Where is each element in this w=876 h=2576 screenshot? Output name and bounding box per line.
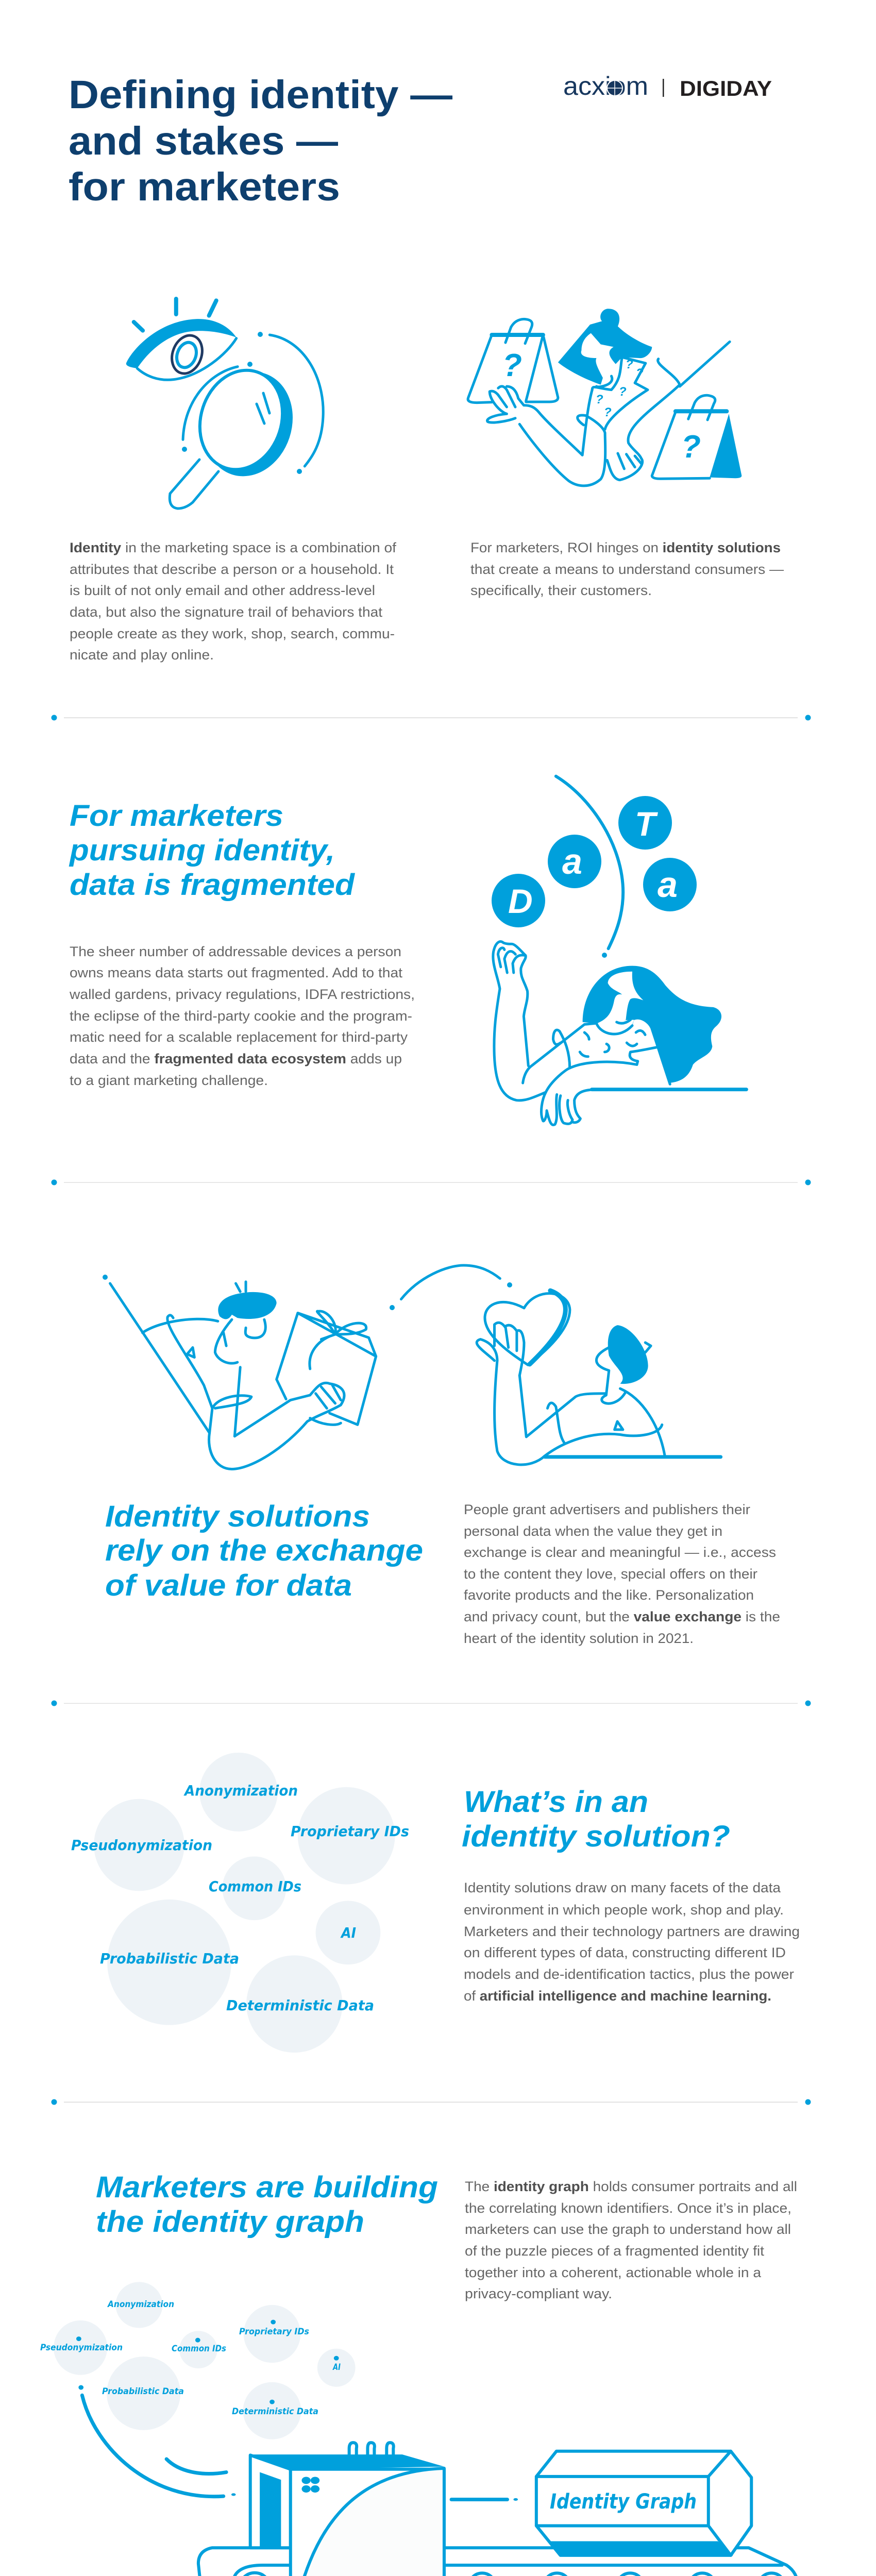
text block: value exchange: exchange is clear and meaningful — i.e., access (464, 1545, 776, 1560)
bubble cluster: identity solution facets (71, 1753, 409, 2053)
text block: fragmented data: matic need for a scalable replacement for third-party (70, 1029, 408, 1045)
logos: acxiom and Digiday: DIGIDAY (680, 76, 772, 100)
title: and stakes — (69, 119, 338, 163)
icon: woman holding shopping bags with question marks: ? (626, 358, 633, 371)
text block: identity definition (70, 540, 397, 663)
small bubble cluster feeding the machine: Common IDs (172, 2344, 226, 2354)
bubble cluster: identity solution facets: Probabilistic Data (100, 1950, 239, 1967)
icon: person juggling DATA letters: D (508, 882, 533, 920)
heading: exchange of value (105, 1500, 423, 1602)
icon: person juggling DATA letters: T (635, 805, 658, 843)
text block: identity graph: together into a coherent, actionable whole in a (465, 2265, 762, 2280)
heading: data is fragmented: data is fragmented (70, 868, 356, 902)
icon: woman holding shopping bags with question marks: ? (502, 348, 522, 383)
small bubble cluster feeding the machine: Probabilistic Data (102, 2386, 184, 2397)
text block: value exchange (464, 1502, 780, 1646)
heading: building the identity graph: Marketers are building (96, 2171, 438, 2204)
text block: identity graph: The identity graph holds consumer portraits and all (465, 2179, 797, 2194)
text block: fragmented data: to a giant marketing challenge. (70, 1073, 268, 1088)
heading: data is fragmented: For marketers (70, 799, 283, 833)
text block: ROI and identity solutions (470, 540, 784, 598)
icon: person with gift and person with heart, value exchange (103, 1265, 721, 1469)
bubble cluster: identity solution facets: Anonymization (183, 1782, 298, 1799)
heading: exchange of value: of value for data (105, 1569, 352, 1602)
icon: eye and magnifying glass (126, 299, 323, 509)
bubble cluster: identity solution facets: Common IDs (209, 1878, 301, 1895)
diagram: conveyor machine producing the identity graph: Identity Graph (550, 2490, 697, 2514)
title: Defining identity — (69, 73, 452, 117)
heading: building the identity graph: the identity graph (96, 2205, 364, 2239)
text block: value exchange: People grant advertisers and publishers their (464, 1502, 750, 1517)
text block: identity graph: of the puzzle pieces of a fragmented identity fit (465, 2243, 765, 2259)
text block: facets of the data environment: Marketers and their technology partners are drawing (464, 1924, 800, 1939)
text block: ROI and identity solutions: that create a means to understand consumers — (470, 562, 784, 577)
text block: value exchange: heart of the identity solution in 2021. (464, 1631, 694, 1646)
text block: identity definition: people create as they work, shop, search, commu- (70, 626, 395, 641)
heading: exchange of value: Identity solutions (105, 1500, 370, 1533)
text block: fragmented data: the eclipse of the third-party cookie and the program- (70, 1008, 412, 1024)
text block: ROI and identity solutions: specifically, their customers. (470, 583, 652, 598)
icon: woman holding shopping bags with question marks: ? (596, 393, 603, 406)
title (69, 73, 452, 209)
text block: identity definition: Identity in the marketing space is a combination of (70, 540, 397, 555)
text block: fragmented data: walled gardens, privacy regulations, IDFA restrictions, (69, 987, 415, 1002)
icon: woman holding shopping bags with question marks: ? (681, 429, 701, 465)
bubble cluster: identity solution facets: Proprietary IDs (291, 1823, 409, 1840)
small bubble cluster feeding the machine (40, 2282, 356, 2439)
bubble cluster: identity solution facets: AI (340, 1924, 356, 1941)
text block: identity graph (465, 2179, 797, 2301)
text block: facets of the data environment: on different types of data, constructing different ID (464, 1945, 786, 1960)
text block: identity definition: is built of not only email and other address-level (70, 583, 375, 598)
text block: value exchange: favorite products and the like. Personalization (464, 1587, 754, 1603)
heading: exchange of value: rely on the exchange (105, 1534, 423, 1567)
text block: ROI and identity solutions: For marketers, ROI hinges on identity solutions (470, 540, 781, 555)
text block: fragmented data (69, 944, 415, 1088)
heading: data is fragmented: pursuing identity, (69, 834, 335, 867)
icon: woman holding shopping bags with question marks: ? (604, 405, 612, 419)
text block: identity graph: marketers can use the graph to understand how all (465, 2222, 791, 2237)
text block: identity graph: the correlating known identifiers. Once it’s in place, (465, 2200, 791, 2216)
text block: identity definition: data, but also the signature trail of behaviors that (70, 604, 383, 620)
small bubble cluster feeding the machine: Anonymization (107, 2299, 174, 2310)
icon: woman holding shopping bags with question marks: ? (636, 366, 644, 380)
logos: acxiom and Digiday: acxiom (563, 72, 648, 100)
diagram: conveyor machine producing the identity graph (82, 2395, 798, 2576)
text block: identity graph: privacy-compliant way. (465, 2286, 612, 2301)
text block: facets of the data environment: models and de-identification tactics, plus the power (464, 1967, 794, 1982)
small bubble cluster feeding the machine: Pseudonymization (40, 2343, 123, 2353)
text block: fragmented data: data and the fragmented data ecosystem adds up (70, 1051, 402, 1066)
icon: person juggling DATA letters (492, 776, 746, 1125)
text block: value exchange: to the content they love, special offers on their (464, 1566, 757, 1582)
heading: building the identity graph (96, 2171, 438, 2239)
text block: fragmented data: owns means data starts out fragmented. Add to that (70, 965, 403, 980)
bubble cluster: identity solution facets: Pseudonymization (71, 1837, 212, 1854)
heading: data is fragmented (69, 799, 356, 902)
text block: facets of the data environment: environment in which people work, shop and play. (464, 1902, 784, 1918)
small bubble cluster feeding the machine: Proprietary IDs (239, 2327, 309, 2337)
text block: fragmented data: The sheer number of addressable devices a person (70, 944, 401, 959)
text block: value exchange: personal data when the value they get in (464, 1523, 722, 1539)
icon: person juggling DATA letters: a (562, 841, 582, 882)
text block: facets of the data environment: Identity solutions draw on many facets of the data (464, 1880, 781, 1895)
heading: what's in an identity solution: What’s in an (464, 1785, 648, 1819)
text block: value exchange: and privacy count, but the value exchange is the (464, 1609, 780, 1624)
icon: woman holding shopping bags with question marks (468, 309, 742, 486)
icon: woman holding shopping bags with question marks: ? (619, 385, 627, 399)
text block: identity definition: nicate and play online. (70, 647, 214, 663)
small bubble cluster feeding the machine: Deterministic Data (232, 2406, 318, 2417)
text block: facets of the data environment: of artificial intelligence and machine learning. (464, 1988, 771, 2004)
small bubble cluster feeding the machine: AI (332, 2362, 341, 2372)
icon: person juggling DATA letters: a (658, 865, 678, 905)
title: for marketers (69, 165, 340, 209)
heading: what's in an identity solution (462, 1785, 730, 1853)
heading: what's in an identity solution: identity solution? (462, 1820, 730, 1853)
text block: facets of the data environment (464, 1880, 800, 2004)
text block: identity definition: attributes that describe a person or a household. It (70, 562, 394, 577)
bubble cluster: identity solution facets: Deterministic Data (226, 1997, 374, 2014)
logos: acxiom and Digiday (563, 72, 772, 100)
